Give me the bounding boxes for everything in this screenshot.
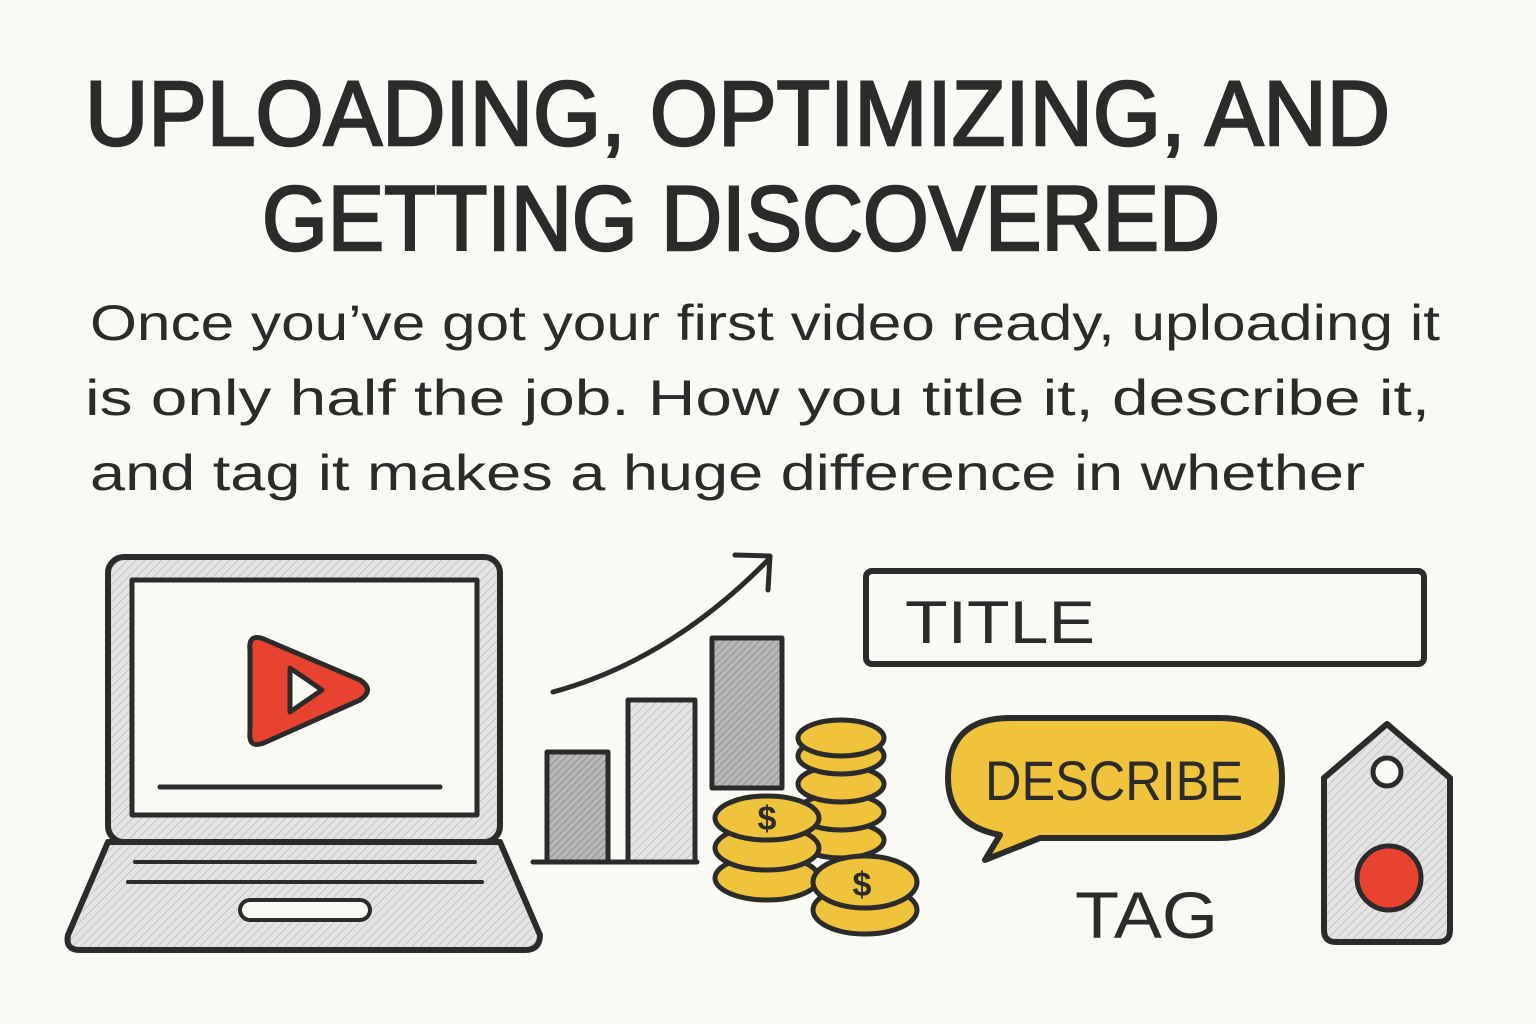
intro paragraph: is only half the job. How you title it, describe it, (85, 370, 1430, 426)
arrow (553, 555, 770, 692)
speech bubble: describe: DESCRIBE (985, 749, 1243, 812)
icon: play button (250, 638, 368, 744)
icon: coins (715, 720, 917, 934)
title: GETTING DISCOVERED (262, 168, 1220, 270)
intro paragraph: Once you’ve got your first video ready, uploading it (90, 295, 1440, 351)
icon: tag (1324, 724, 1450, 942)
intro paragraph (85, 295, 1440, 501)
tag label: TAG (1075, 878, 1218, 952)
title field (866, 571, 1424, 664)
title (85, 63, 1390, 270)
icon: coins: $ (758, 800, 777, 838)
title field: TITLE (905, 589, 1095, 656)
icon: laptop (68, 557, 540, 950)
bar chart with growth arrow (533, 555, 782, 862)
title: UPLOADING, OPTIMIZING, AND (85, 63, 1390, 165)
intro paragraph: and tag it makes a huge difference in whether (90, 445, 1365, 501)
speech bubble: describe (948, 718, 1282, 860)
icon: coins: $ (853, 866, 872, 904)
